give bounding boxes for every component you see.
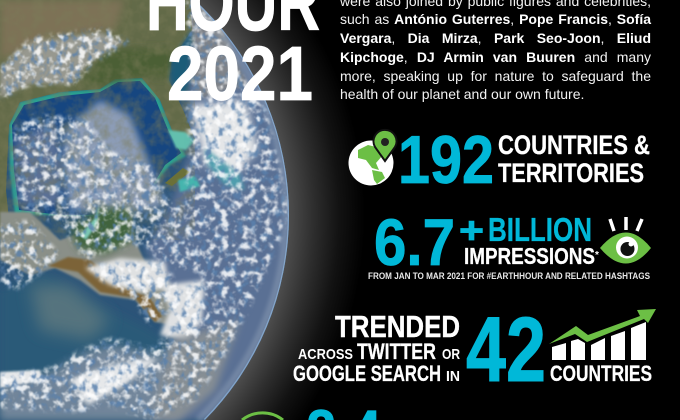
- stat: 6.7 billion impressions: +: [459, 210, 484, 251]
- intro text block: Kipchoge, DJ Armin van Buuren and many: [340, 49, 651, 65]
- stat: trended in 42 countries: ACROSS: [298, 346, 353, 363]
- stat: trended in 42 countries: OR: [442, 346, 460, 363]
- ocean base: [0, 42, 205, 420]
- stat: 6.7 billion impressions: IMPRESSIONS: [464, 243, 595, 269]
- icon: green circle, cut off at bottom: [242, 413, 283, 420]
- North American land: [0, 0, 195, 240]
- chart: rising bars: [552, 322, 646, 360]
- stat: 6.7 billion impressions: BILLION: [488, 211, 592, 248]
- Gulf of Mexico with teal shelf: [9, 78, 186, 215]
- stat: trended in 42 countries: [293, 299, 656, 401]
- atmosphere limb: [195, 0, 289, 420]
- stat: trended in 42 countries: IN: [446, 368, 460, 385]
- stat: trended in 42 countries: TRENDED: [335, 309, 460, 344]
- arrow: green upward trend: [549, 309, 656, 344]
- title: 2021: [167, 31, 313, 117]
- bright cloud texture: [0, 0, 300, 420]
- intro text block: Vergara, Dia Mirza, Park Seo-Joon, Eliud: [340, 30, 651, 46]
- mottled cloud mass in gulf: [62, 100, 165, 215]
- icon: globe with location pin: [348, 130, 397, 186]
- stat: 6.7 billion impressions: [368, 205, 651, 282]
- intro text block: more, speaking up for nature to safeguard the: [340, 68, 651, 84]
- Pacific: [0, 272, 172, 420]
- intro text block: [340, 0, 652, 102]
- stat: trended in 42 countries: GOOGLE SEARCH: [293, 361, 441, 386]
- stat: 6.7 billion impressions: *: [595, 250, 599, 261]
- stat: 192 countries and territories: TERRITORIES: [498, 158, 644, 188]
- stat: 192 countries and territories: [348, 122, 650, 198]
- title: [146, 0, 320, 117]
- Pacific haze: [30, 285, 110, 340]
- dark gaps in clouds: [0, 0, 300, 420]
- stat: 6.7 billion impressions: 6.7: [374, 205, 455, 279]
- Atlantic cloud tone: [145, 0, 300, 420]
- intro text block: such as António Guterres, Pope Francis, Sofía: [340, 11, 651, 27]
- stat: trended in 42 countries: COUNTRIES: [550, 361, 652, 386]
- bright cloud bank east of Florida: [190, 100, 258, 175]
- earth: satellite view of the Americas: [0, 0, 300, 420]
- stat: trended in 42 countries: 42: [466, 299, 546, 401]
- stat: 192 countries and territories: 192: [398, 122, 494, 198]
- intro text block: health of our planet and our own future.: [340, 86, 584, 102]
- Cuba and Bahamas: [165, 148, 245, 192]
- grey streak cloud north-east: [187, 0, 248, 100]
- Gulf Stream coast: [170, 30, 192, 100]
- stat: trended in 42 countries: TWITTER: [357, 339, 436, 364]
- stat: 192 countries and territories: COUNTRIES &: [498, 130, 650, 160]
- Mexico and Central America: [0, 208, 205, 342]
- southern cloud banks: [0, 320, 240, 420]
- icon: eye: [600, 217, 651, 264]
- Yucatan shelf: [80, 205, 99, 240]
- Florida shelf: [168, 130, 195, 150]
